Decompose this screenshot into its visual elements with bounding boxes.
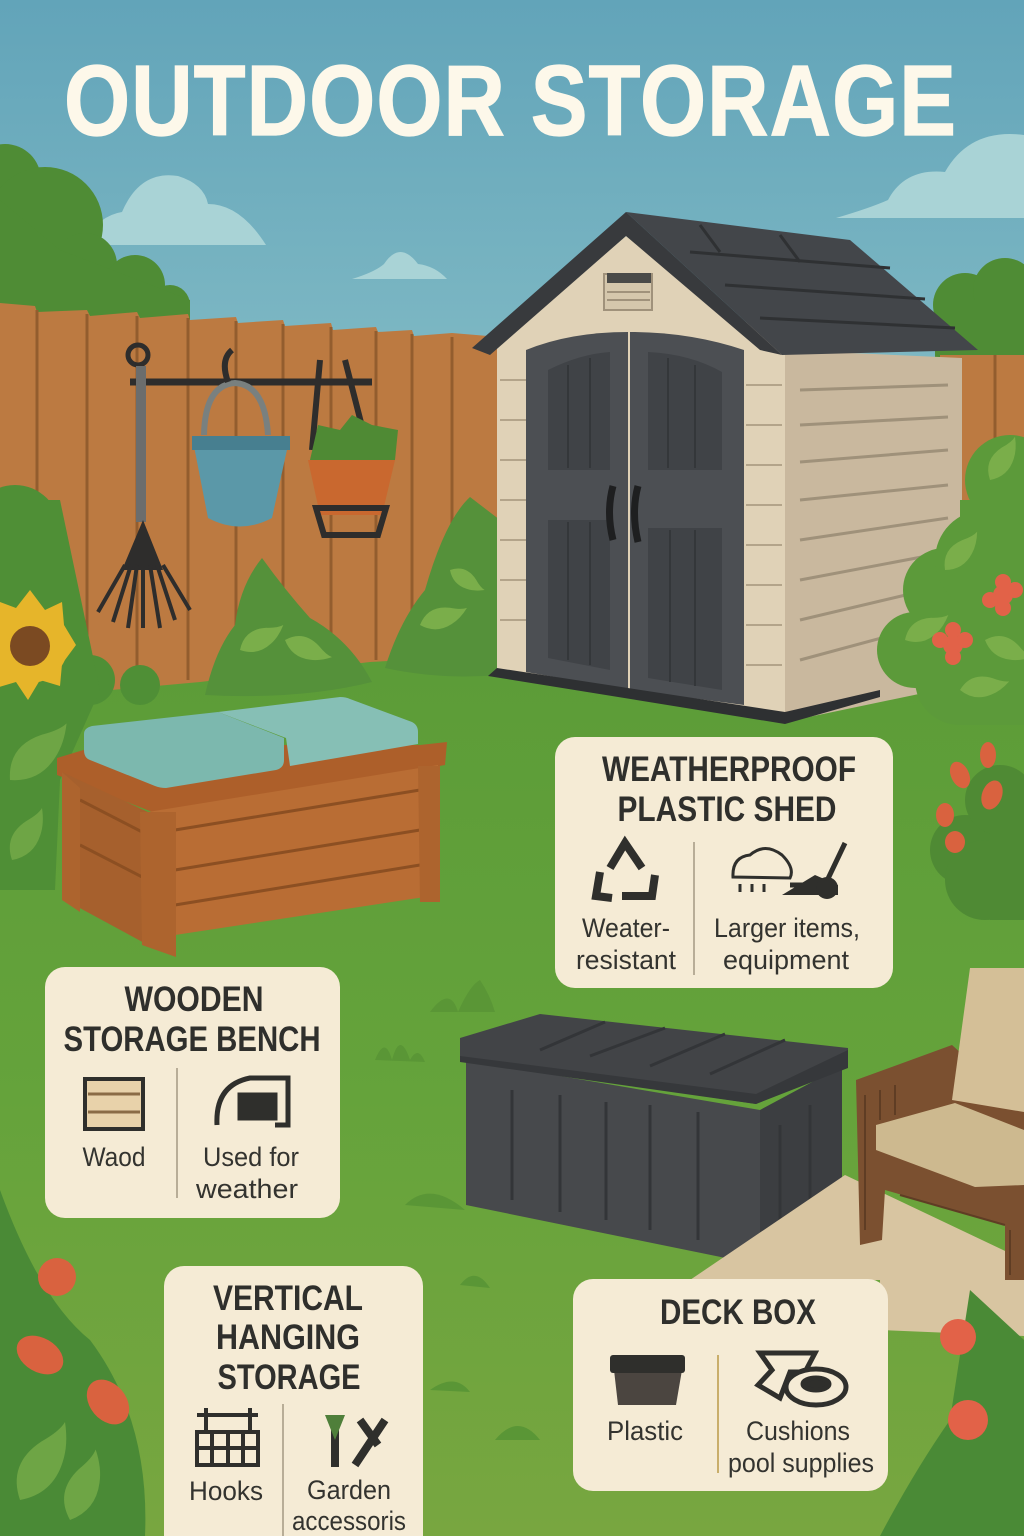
patio and wicker chair (690, 968, 1024, 1336)
sky background (0, 0, 1024, 700)
cushions (84, 712, 284, 788)
deck box (460, 1014, 848, 1265)
label: Larger items, (714, 913, 860, 943)
label: Used for (203, 1142, 299, 1172)
heading: WOODEN (124, 980, 264, 1019)
bottom plants (0, 1190, 1024, 1536)
background bushes (0, 144, 1024, 370)
clouds (78, 134, 1024, 279)
panel: wooden storage bench: weather (195, 1174, 298, 1204)
vent (604, 274, 652, 310)
panel: vertical hanging storage: STORAGE (218, 1358, 360, 1397)
label: Cushions (746, 1416, 850, 1446)
icon: hanging plant pot (308, 360, 398, 535)
label: Plastic (607, 1416, 683, 1446)
panel: weatherproof plastic shed: PLASTIC SHED (618, 790, 836, 829)
icon: wood planks (85, 1079, 143, 1129)
panel: deck box (573, 1279, 888, 1491)
panel: weatherproof plastic shed: equipment (723, 945, 849, 975)
wooden bench (57, 697, 447, 957)
label: Weater- (582, 913, 670, 943)
icon: folded chair (217, 1078, 288, 1125)
icon: plastic box (610, 1355, 685, 1405)
icon: rake (98, 366, 190, 628)
shed roof (626, 212, 978, 355)
label: Garden (307, 1475, 391, 1505)
panel: vertical hanging storage: HANGING (216, 1318, 360, 1357)
bush right (877, 432, 1024, 920)
sunflower and left plants (0, 485, 160, 890)
shed side wall (785, 350, 962, 722)
shed doors (526, 332, 628, 690)
panel: deck box: pool supplies (728, 1448, 874, 1478)
panel: vertical hanging storage (164, 1266, 423, 1536)
lawn (0, 660, 1024, 1536)
grass tufts (375, 980, 540, 1440)
heading: DECK BOX (660, 1293, 817, 1332)
panel: vertical hanging storage: accessoris (292, 1506, 406, 1536)
plastic shed (472, 212, 978, 724)
hanging storage rail with tools (98, 345, 398, 628)
icon: hook rack (197, 1408, 258, 1465)
panel: weatherproof plastic shed: resistant (576, 945, 676, 975)
red flowers (932, 574, 1023, 665)
sunflower (0, 590, 76, 700)
title: OUTDOOR STORAGE (64, 44, 956, 157)
heading: WEATHERPROOF (602, 750, 856, 789)
label: Hooks (189, 1476, 263, 1506)
icon: garden tools (325, 1415, 385, 1467)
icon: recycling arrows (596, 843, 655, 898)
panel: wooden storage bench (45, 967, 340, 1218)
shed front wall (497, 236, 785, 722)
icon: blue bucket (192, 350, 290, 526)
fence bushes (205, 497, 500, 696)
wooden fence (0, 303, 1024, 700)
panel: weatherproof plastic shed (555, 737, 893, 988)
icon: cloud and lawn mower (733, 843, 845, 899)
heading: VERTICAL (213, 1279, 363, 1318)
icon: cushion and pool ring (758, 1353, 846, 1405)
label: Waod (82, 1142, 146, 1172)
panel: wooden storage bench: STORAGE BENCH (64, 1020, 320, 1059)
